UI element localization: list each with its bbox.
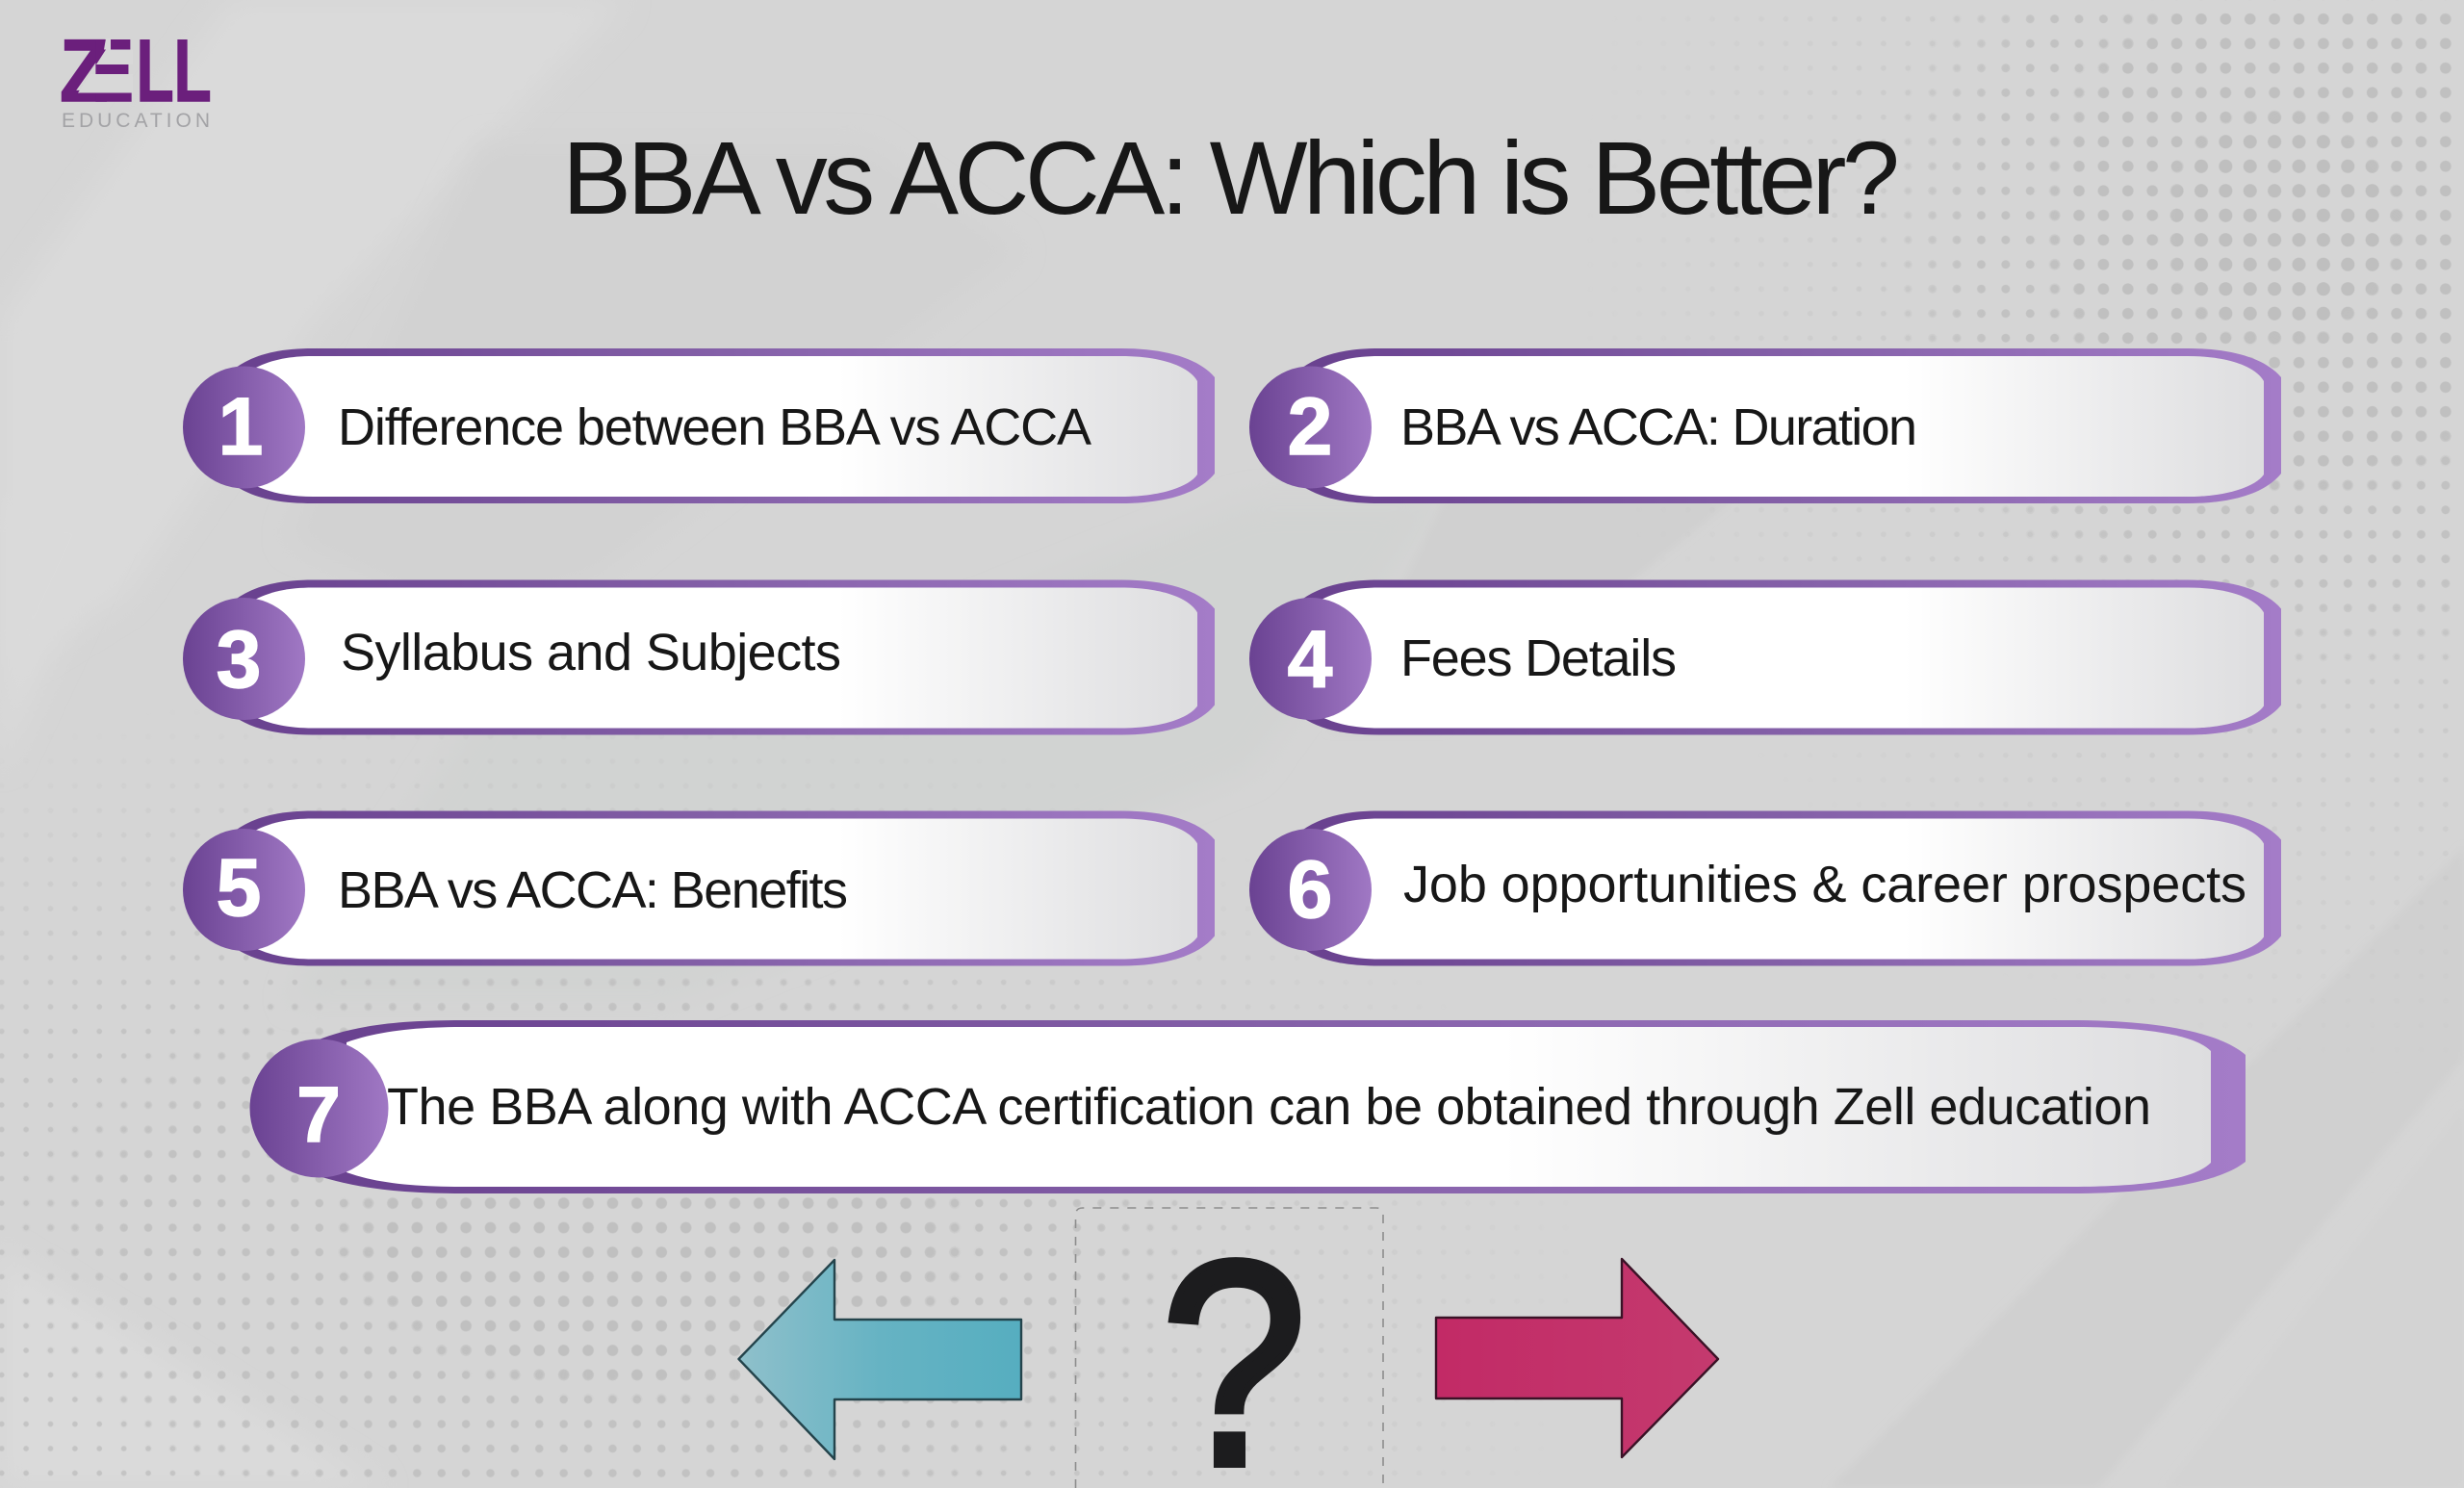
dashed box around question mark: [1076, 1208, 1383, 1488]
item 1: Difference between BBA vs ACCA: [183, 348, 1215, 503]
item 5: BBA vs ACCA: Benefits: [183, 810, 1215, 966]
item 3: Syllabus and Subjects: 3: [217, 614, 261, 705]
item 2: BBA vs ACCA: Duration: BBA vs ACCA: Duration: [1400, 398, 1917, 456]
logo: Zell Education: [60, 22, 212, 132]
item 5: BBA vs ACCA: Benefits: 5: [217, 842, 261, 933]
item 7: The BBA along with ACCA certification: [250, 1020, 2246, 1193]
logo wordmark: Z: [60, 22, 109, 120]
icon: left arrow: [739, 1260, 1021, 1459]
item 1: Difference between BBA vs ACCA: Difference between BBA vs ACCA: [338, 398, 1091, 456]
item 2: BBA vs ACCA: Duration: [1249, 348, 2281, 503]
logo wordmark: E: [92, 22, 134, 120]
item 3: Syllabus and Subjects: [183, 579, 1215, 735]
item 2: BBA vs ACCA: Duration: 2: [1288, 381, 1332, 472]
item 4: Fees Details: [1249, 579, 2281, 735]
item 4: Fees Details: Fees Details: [1400, 629, 1677, 687]
item 7: The BBA along with ACCA certification: The BBA along with ACCA certification can be obtained through Zell education: [387, 1078, 2151, 1136]
item 6: Job opportunities & career prospects: [1249, 810, 2281, 966]
item 5: BBA vs ACCA: Benefits: BBA vs ACCA: Benefits: [338, 861, 848, 919]
item 7: The BBA along with ACCA certification: 7: [296, 1071, 341, 1159]
item 6: Job opportunities & career prospects: Job opportunities & career prospects: [1403, 856, 2246, 913]
icon: right arrow: [1436, 1259, 1718, 1457]
logo wordmark: L: [174, 22, 212, 120]
item 1: Difference between BBA vs ACCA: 1: [218, 381, 263, 472]
item 3: Syllabus and Subjects: Syllabus and Subjects: [341, 624, 841, 681]
logo wordmark: L: [137, 22, 174, 120]
item 6: Job opportunities & career prospects: 6: [1288, 844, 1332, 935]
logo tagline: EDUCATION: [62, 110, 210, 132]
title: BBA vs ACCA: Which is Better?: [562, 119, 1900, 236]
item 4: Fees Details: 4: [1288, 614, 1333, 705]
